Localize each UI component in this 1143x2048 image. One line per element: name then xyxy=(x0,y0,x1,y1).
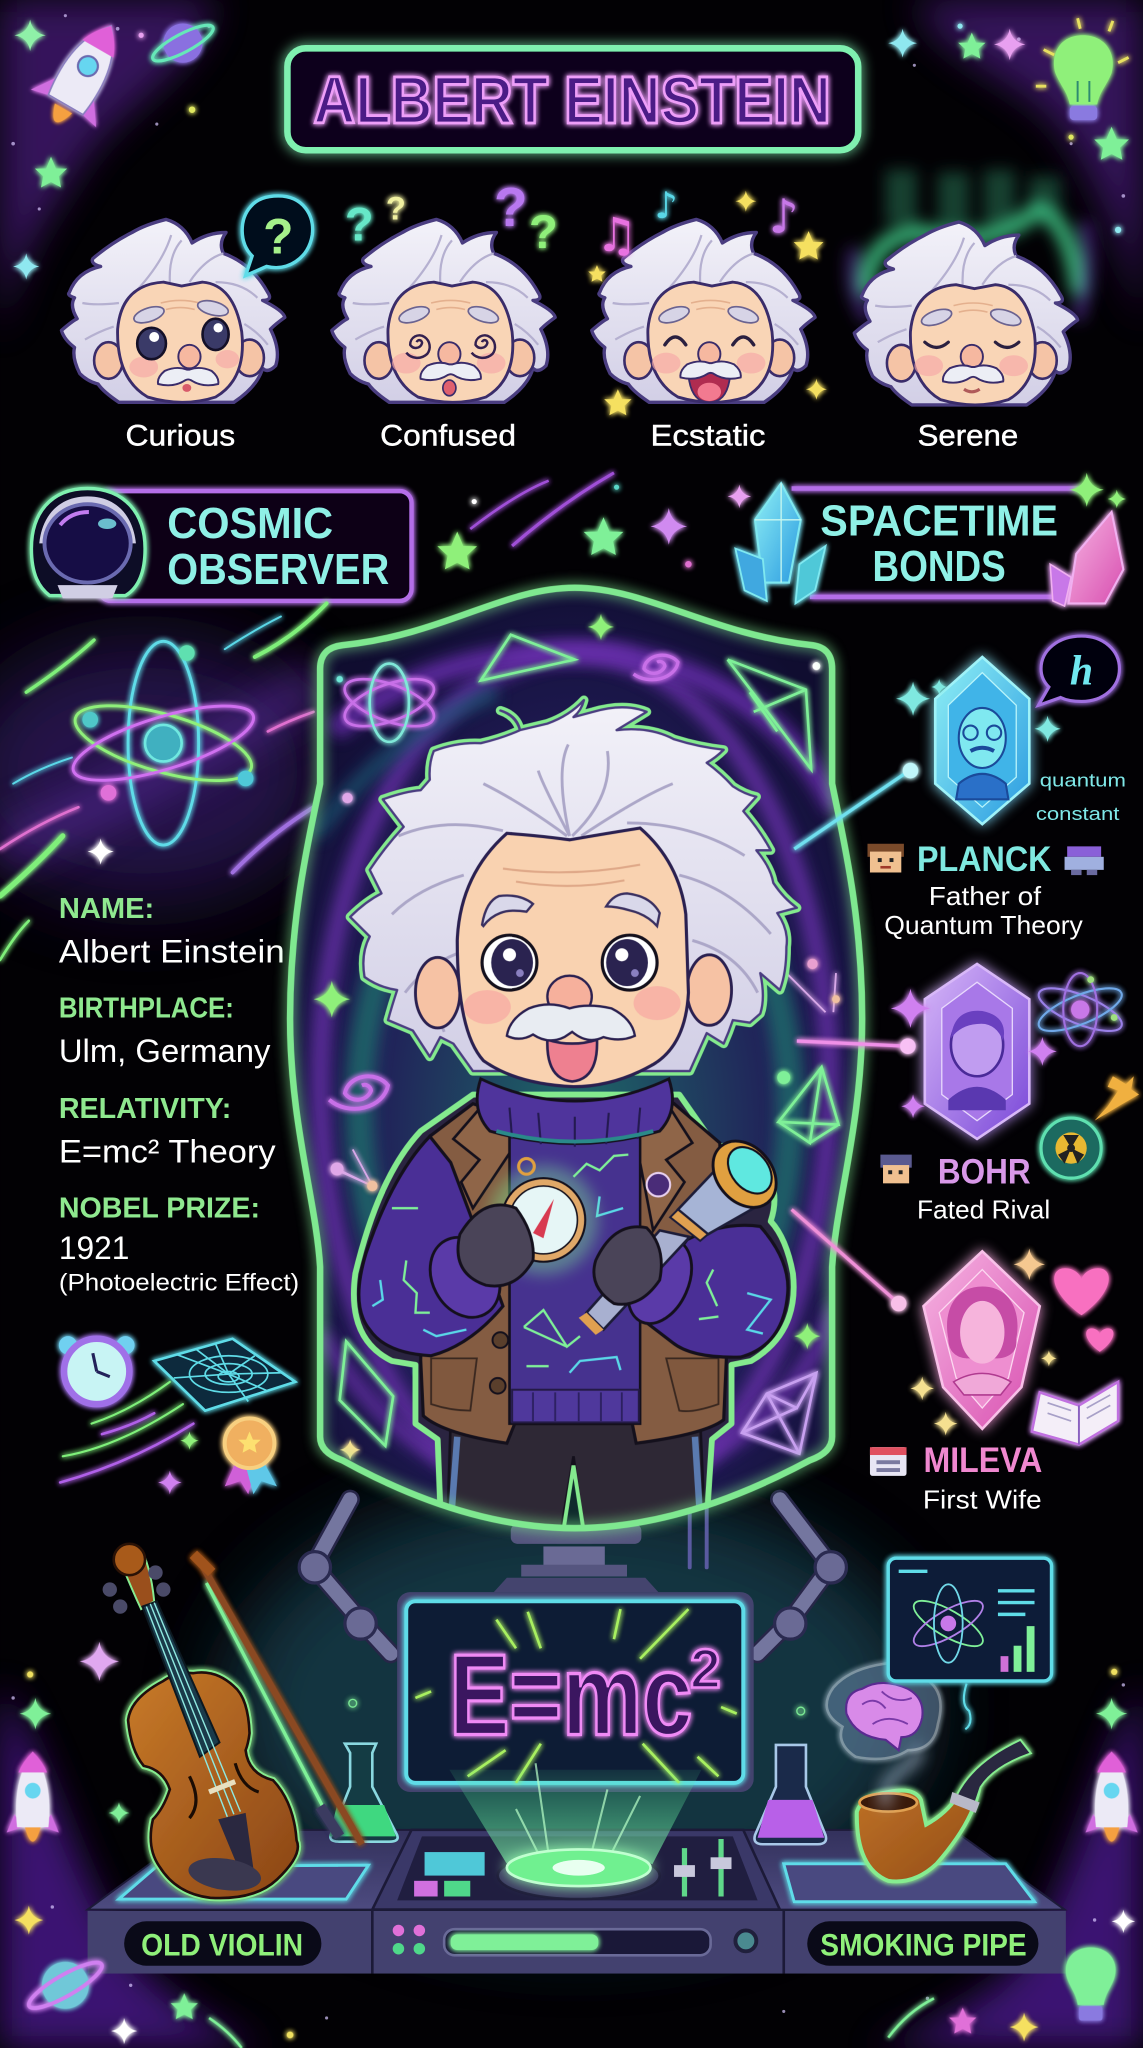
panel: Mileva: First Wife xyxy=(923,1485,1042,1515)
console base xyxy=(88,1830,1066,1974)
connector: Bohr xyxy=(797,1038,916,1054)
music notes and stars: ♪ xyxy=(655,184,678,227)
portrait: Confused xyxy=(332,176,558,452)
equation exponent: 2 xyxy=(690,1638,721,1700)
icon: bomb xyxy=(1041,1076,1139,1178)
music notes and stars: ♫ xyxy=(595,208,638,263)
fact: relativity xyxy=(59,1093,276,1169)
right flask xyxy=(754,1745,826,1844)
heading text: SPACETIME xyxy=(820,498,1058,546)
icon: warped spacetime grid xyxy=(154,1339,295,1411)
stand arms behind frame xyxy=(299,1499,846,1654)
icon: pixel face xyxy=(867,844,904,872)
sleeves xyxy=(359,1136,788,1357)
heading text: COSMIC xyxy=(167,500,333,548)
portrait: Curious xyxy=(61,196,313,452)
question marks xyxy=(345,176,558,258)
green sticker outline xyxy=(354,1095,794,1541)
compass xyxy=(489,1159,598,1275)
ears xyxy=(415,955,732,1028)
connector: Planck xyxy=(794,763,918,849)
speech bubble h xyxy=(1038,636,1119,705)
frame swirl background xyxy=(314,614,840,1515)
equation: E=mc xyxy=(449,1632,692,1760)
decoration: comets and stars between headings xyxy=(437,473,751,569)
mustache xyxy=(507,1004,635,1040)
panel: Bohr: Fated Rival xyxy=(917,1195,1050,1225)
speech bubble h: h xyxy=(1070,648,1093,694)
question marks: ? xyxy=(386,189,406,226)
connector: Mileva xyxy=(792,1209,907,1311)
fact: nobel prize: NOBEL PRIZE: xyxy=(59,1192,260,1224)
icon: pixel face xyxy=(880,1155,912,1183)
progress bar xyxy=(444,1929,756,1955)
tongue xyxy=(547,1040,597,1081)
central Einstein character xyxy=(290,588,862,1541)
decoration: rocket bottom left xyxy=(7,1752,59,1842)
shooting stars xyxy=(0,603,327,960)
label: Ecstatic xyxy=(651,419,765,452)
portrait: Serene with aurora xyxy=(853,170,1088,452)
decoration: glowing stars top left xyxy=(13,20,195,280)
icon: alarm clock xyxy=(59,1336,135,1404)
label: old violin: OLD VIOLIN xyxy=(141,1927,303,1962)
fact: nobel prize: (Photoelectric Effect) xyxy=(59,1269,299,1296)
violin body xyxy=(128,1672,298,1898)
side trays xyxy=(119,1864,1035,1902)
collar xyxy=(477,1079,672,1147)
icon: hearts xyxy=(1054,1268,1113,1352)
name and role: BOHR xyxy=(938,1152,1031,1191)
sweater xyxy=(509,1126,640,1424)
telescope xyxy=(579,1129,789,1335)
panel: Mileva xyxy=(870,1249,1118,1515)
fact: birthplace: BIRTHPLACE: xyxy=(59,992,234,1024)
icon: medal xyxy=(225,1418,277,1494)
label: Serene xyxy=(918,419,1018,452)
fact: birthplace: Ulm, Germany xyxy=(59,1032,271,1069)
panel: Bohr xyxy=(880,964,1139,1225)
fact: nobel prize: 1921 xyxy=(59,1229,129,1266)
title banner xyxy=(287,48,858,150)
decoration: rocket bottom right xyxy=(1085,1752,1138,1842)
fact: relativity: E=mc² Theory xyxy=(59,1132,276,1169)
icon: pink crystals xyxy=(1050,473,1126,606)
icon: calendar xyxy=(870,1447,907,1476)
old violin xyxy=(103,1544,362,1898)
left flask xyxy=(329,1744,398,1842)
icon: open book xyxy=(1032,1382,1118,1445)
fact: name: Albert Einstein xyxy=(59,933,285,970)
music notes and stars xyxy=(588,184,827,415)
title text: ALBERT EINSTEIN xyxy=(314,64,831,138)
name and role: MILEVA xyxy=(923,1441,1042,1480)
icon: astronaut helmet xyxy=(31,488,145,598)
label: Curious xyxy=(125,419,235,452)
panel: Planck: Father of xyxy=(929,881,1042,911)
label: Confused xyxy=(380,419,516,452)
decoration: motion streaks xyxy=(60,1382,199,1494)
icon: teal crystals xyxy=(735,483,826,603)
left panel: fact list xyxy=(59,893,299,1296)
hair xyxy=(350,700,797,1071)
decoration: sparkles around console xyxy=(14,1642,1135,1934)
panel: Planck: Quantum Theory xyxy=(884,910,1083,940)
fact: relativity: RELATIVITY: xyxy=(59,1093,231,1125)
question marks: ? xyxy=(494,176,528,238)
speech bubble with question mark: ? xyxy=(263,208,293,264)
heading panel: cosmic observer xyxy=(31,488,412,601)
frame neon outline xyxy=(290,588,862,1528)
smoking pipe xyxy=(857,1741,1029,1881)
question marks: ? xyxy=(345,197,374,250)
bow xyxy=(193,1554,362,1844)
music notes and stars: ♪ xyxy=(769,189,799,244)
pants xyxy=(446,1426,706,1526)
gem portrait xyxy=(924,1251,1040,1429)
panel: Planck xyxy=(867,636,1126,940)
decoration: sparkles xyxy=(910,1249,1057,1435)
central figure frame xyxy=(290,588,862,1528)
question marks: ? xyxy=(529,205,558,258)
left panel: nebula streaks and atom xyxy=(0,603,327,960)
status lights xyxy=(393,1925,425,1954)
caption: quantum xyxy=(1040,769,1126,790)
decoration: sparkles xyxy=(891,989,1057,1118)
icon: atom xyxy=(1034,973,1127,1046)
decoration: stars top right xyxy=(888,24,1129,233)
icon: pixel machine xyxy=(1065,846,1104,875)
smoke and brain thought cloud xyxy=(827,1663,941,1806)
decoration: rocket top left xyxy=(23,7,144,141)
gem portrait xyxy=(925,964,1029,1139)
name and role: PLANCK xyxy=(917,840,1052,879)
heading panel: cosmic observer: OBSERVER xyxy=(167,546,389,594)
hologram screen xyxy=(397,1592,754,1792)
fact: name xyxy=(59,893,285,970)
decoration: lightbulb bottom right xyxy=(1066,1947,1116,2021)
eyes xyxy=(482,935,657,990)
heading panel: spacetime bonds: BONDS xyxy=(873,543,1006,591)
speech bubble with question mark xyxy=(242,196,313,276)
aurora xyxy=(853,170,1088,320)
hologram beam and emitter xyxy=(449,1763,701,1899)
gem portrait xyxy=(935,657,1029,824)
portrait: Ecstatic xyxy=(588,184,827,452)
face xyxy=(457,828,688,1087)
fact: nobel prize xyxy=(59,1192,299,1296)
decoration: stars along bottom xyxy=(111,1993,1038,2048)
panel: Planck: constant xyxy=(1036,803,1119,824)
decoration: planet bottom left xyxy=(24,1955,107,2015)
fact: name: NAME: xyxy=(59,893,154,925)
fact: birthplace xyxy=(59,992,271,1069)
decoration: planet top left xyxy=(149,19,217,67)
floating data monitor xyxy=(888,1558,1052,1729)
flasks xyxy=(329,1744,826,1844)
lightning sparks xyxy=(415,1609,737,1783)
jacket xyxy=(421,1104,726,1443)
decoration: sparkles xyxy=(896,679,1061,742)
geometric shapes xyxy=(329,635,839,1454)
gloves xyxy=(458,1205,661,1304)
label: smoking pipe: SMOKING PIPE xyxy=(820,1927,1027,1962)
decoration: lightbulb top right xyxy=(1036,18,1129,120)
control pads xyxy=(414,1839,732,1896)
heading panel: spacetime bonds xyxy=(735,473,1126,606)
icon: atom xyxy=(66,641,261,865)
